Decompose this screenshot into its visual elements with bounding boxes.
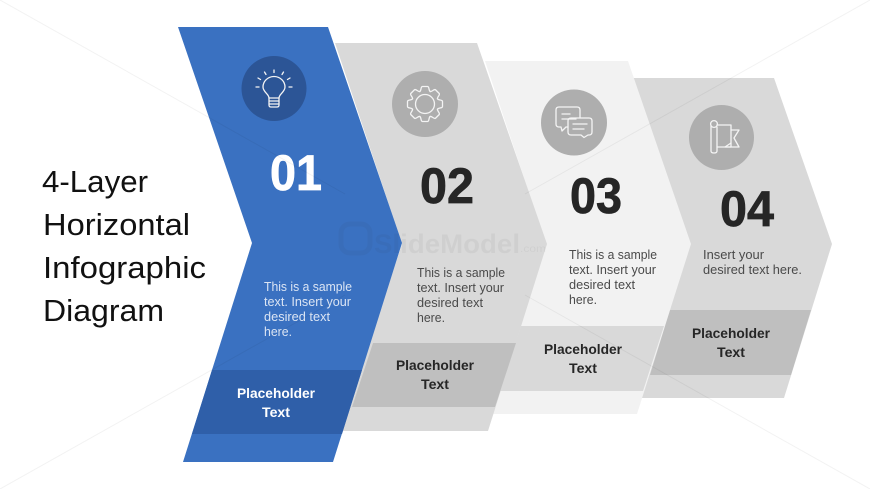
- panel: layer 02: Text: [421, 376, 449, 392]
- icon: chat bubbles: [556, 107, 592, 138]
- panel: layer 04: desired text here.: [703, 262, 802, 277]
- panel: layer 04: [633, 78, 832, 398]
- panel: layer 02: This is a sample: [417, 265, 505, 280]
- panel: layer 03: This is a sample: [569, 247, 657, 262]
- icon: light bulb: [256, 70, 292, 107]
- panel: layer 02: desired text: [417, 295, 483, 310]
- panel: layer 01: Text: [262, 404, 290, 420]
- panel: layer 04: 04: [720, 181, 774, 237]
- title: Infographic: [43, 250, 206, 285]
- panel: layer 03: desired text: [569, 277, 635, 292]
- panel: layer 04: Text: [717, 344, 745, 360]
- title: Horizontal: [43, 207, 190, 242]
- panel: layer 01: desired text: [264, 309, 330, 324]
- watermark: .com: [520, 244, 546, 255]
- panel: layer 01: text. Insert your: [264, 294, 352, 309]
- panel: layer 02: Placeholder: [396, 357, 475, 373]
- panel: layer 03: here.: [569, 292, 597, 307]
- panel: layer 03: [485, 61, 691, 414]
- panel: layer 03: 03: [570, 168, 622, 224]
- watermark: SlideModel: [374, 229, 520, 259]
- panel: layer 01: here.: [264, 324, 292, 339]
- title: 4-Layer: [42, 164, 148, 199]
- panel: layer 01: Placeholder: [237, 385, 316, 401]
- icon: gear: [408, 86, 442, 122]
- icon: flag: [711, 121, 739, 153]
- panel: layer 02: 02: [420, 158, 474, 214]
- panel: layer 01: [178, 27, 402, 462]
- panel: layer 02: text. Insert your: [417, 280, 505, 295]
- title: [42, 164, 206, 328]
- panel: layer 01: This is a sample: [264, 279, 352, 294]
- panel: layer 03: Placeholder: [544, 341, 623, 357]
- panel: layer 02: [335, 43, 547, 431]
- title: Diagram: [43, 293, 164, 328]
- panel: layer 02: here.: [417, 310, 445, 325]
- panel: layer 03: Text: [569, 360, 597, 376]
- panel: layer 04: Placeholder: [692, 325, 771, 341]
- panel: layer 03: text. Insert your: [569, 262, 657, 277]
- panel: layer 01: 01: [270, 145, 322, 201]
- watermark: [341, 224, 546, 259]
- panel: layer 04: Insert your: [703, 247, 765, 262]
